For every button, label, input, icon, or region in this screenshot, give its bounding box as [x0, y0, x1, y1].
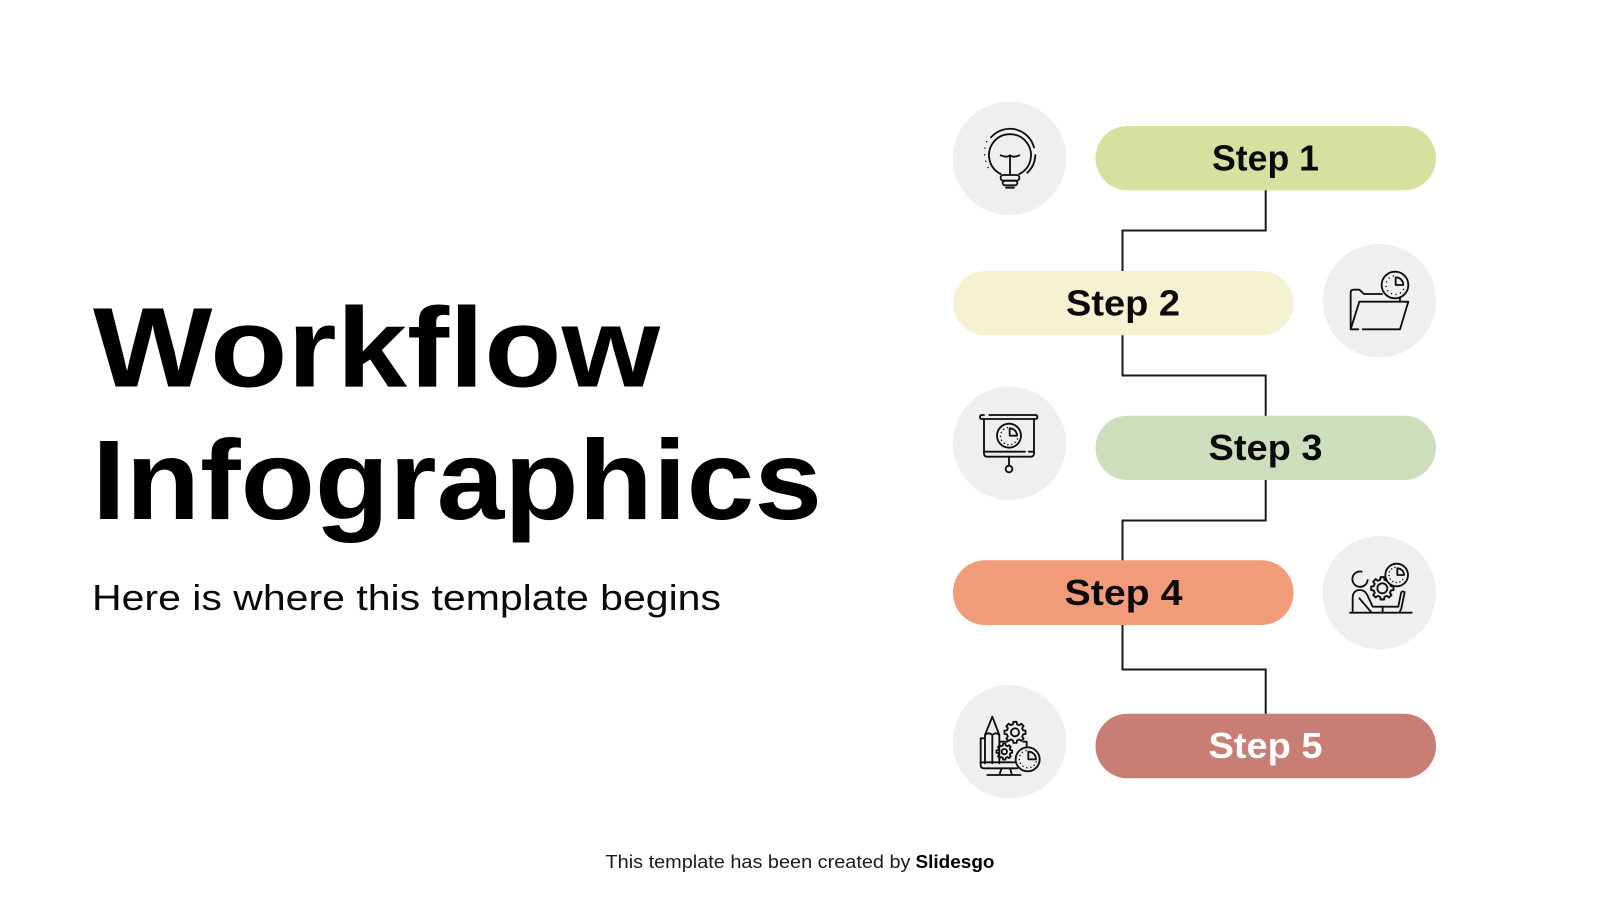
title: Infographics [92, 417, 822, 543]
step 5 pill [1096, 714, 1436, 778]
subtitle: Here is where this template begins [92, 577, 721, 618]
icon circle: folder with clock [1323, 244, 1436, 357]
step 4 pill: Step 4 [1064, 572, 1182, 613]
icon circle: presentation board [953, 387, 1066, 500]
footer credit: Slidesgo [916, 851, 994, 872]
step 5 pill: Step 5 [1208, 725, 1322, 766]
step 1 pill: Step 1 [1212, 138, 1319, 178]
footer credit: This template has been created by [606, 851, 911, 872]
step 3 pill: Step 3 [1208, 427, 1322, 468]
icon circle: design tools with monitor [953, 685, 1066, 798]
title [92, 284, 822, 543]
icon circle: light bulb [953, 102, 1066, 215]
step 2 pill: Step 2 [1066, 282, 1180, 324]
title: Workflow [93, 284, 661, 410]
step 4 pill [953, 560, 1294, 625]
step 3 pill [1096, 416, 1436, 480]
step 2 pill [953, 271, 1294, 335]
connector lines between steps [1122, 190, 1266, 714]
icon circle: person with gear and clock [1323, 536, 1436, 649]
step 1 pill [1096, 126, 1436, 190]
